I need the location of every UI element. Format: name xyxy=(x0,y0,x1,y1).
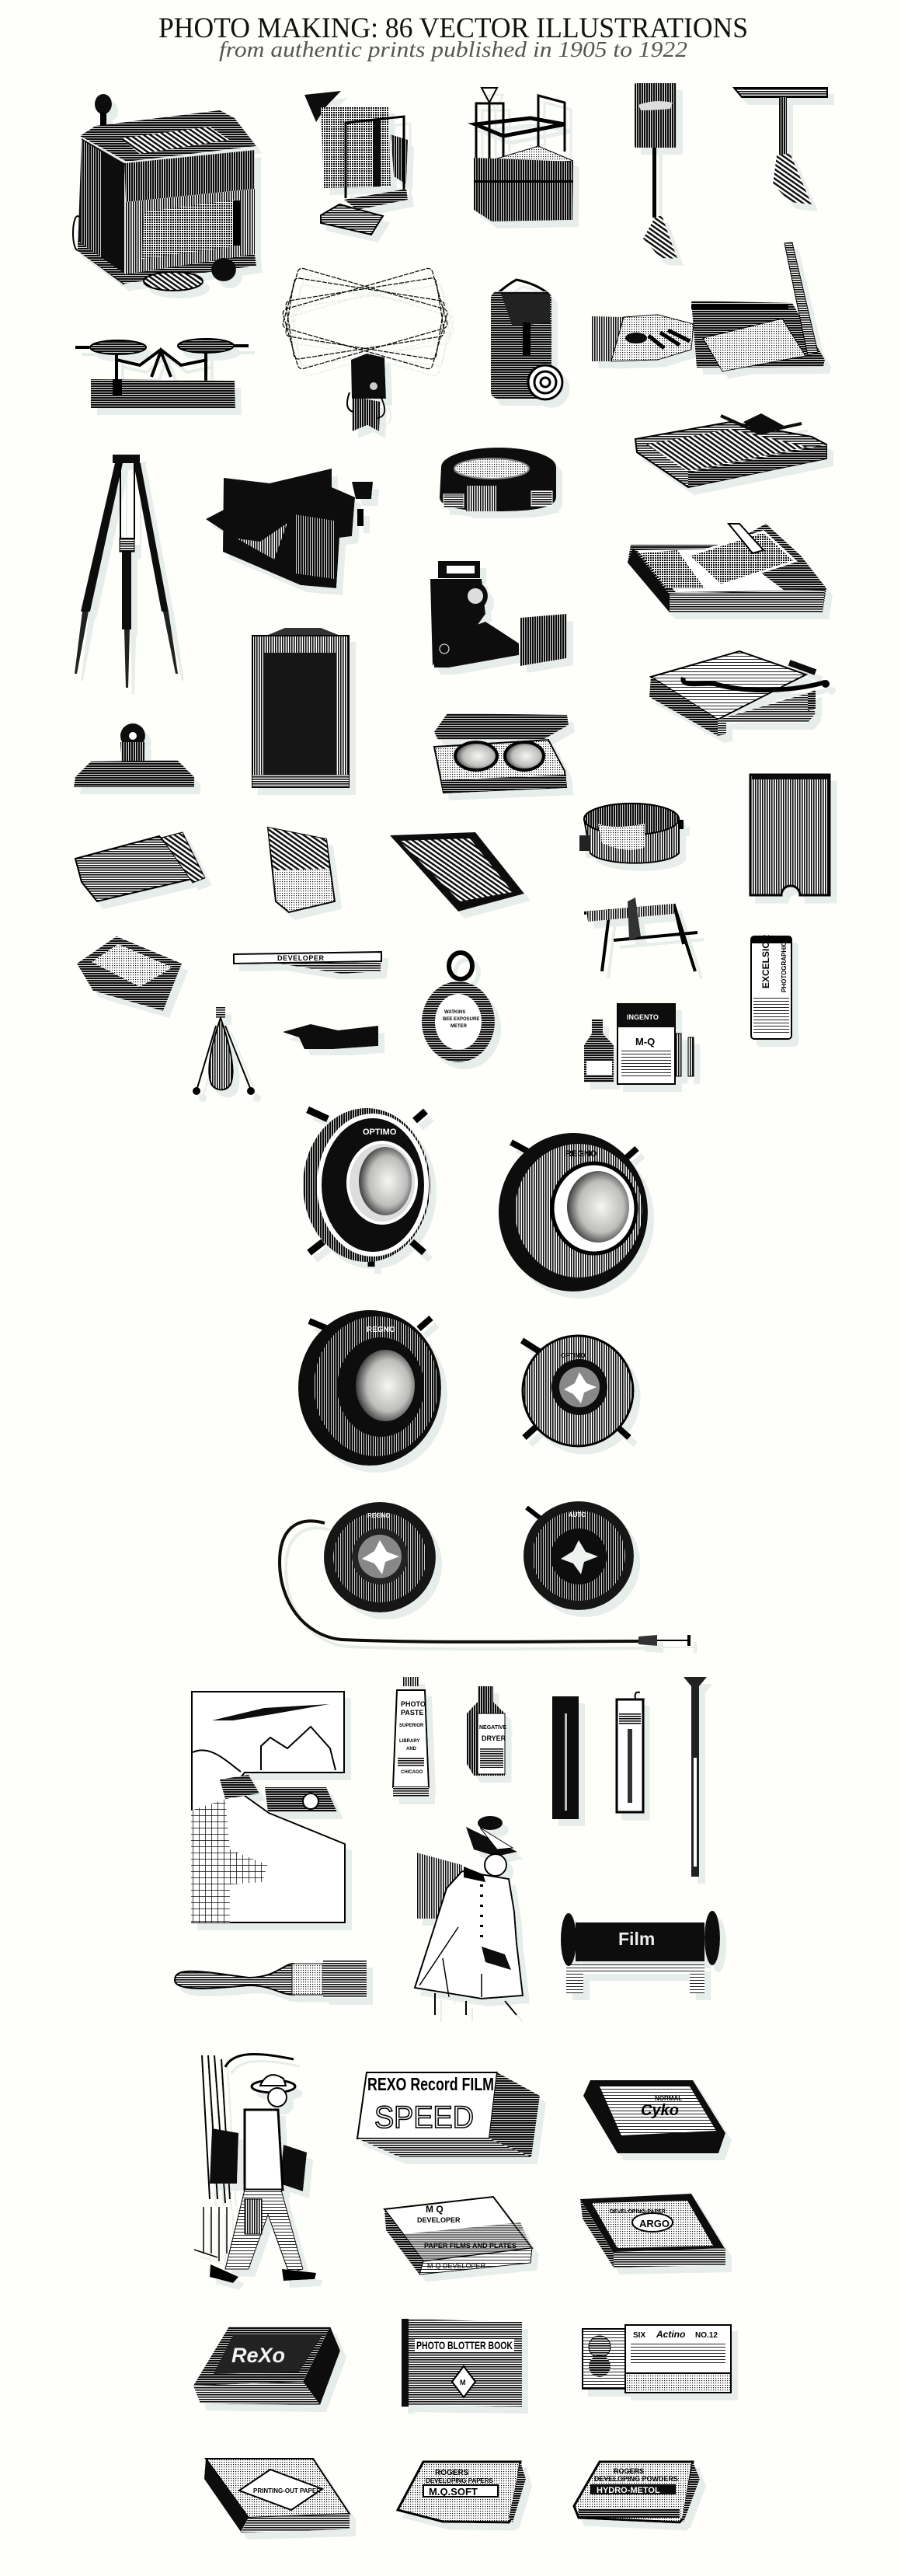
icon: photo paste tube: SUPERIOR xyxy=(399,1724,424,1728)
icon: negative dryer bottle: DRYER xyxy=(482,1734,506,1742)
icon: glass tray xyxy=(77,936,182,1011)
icon: blue print paper tube: EXCELSIOR xyxy=(760,934,771,988)
icon: fanned dry plates and holder xyxy=(282,267,448,431)
icon: rubber glove xyxy=(283,1024,378,1049)
icon: folding camera xyxy=(430,561,567,668)
icon: bulb and clips xyxy=(193,1007,255,1095)
icon: squeegee with hand xyxy=(734,88,827,204)
icon: Cyko normal paper box xyxy=(583,2080,725,2153)
icon: Ingento chemicals: INGENTO xyxy=(627,1013,659,1021)
icon: Argo developing paper box xyxy=(580,2194,725,2268)
icon: Actino No. 12 box: Actino xyxy=(656,2329,685,2340)
icon: dark thermometer xyxy=(552,1696,579,1819)
icon: negative dryer bottle xyxy=(467,1686,507,1776)
icon: photo paste tube xyxy=(393,1677,429,1797)
icon: blue print paper tube xyxy=(751,934,791,1039)
icon: film bag and roll xyxy=(491,280,562,399)
icon: Hydro-Metol developing powders box xyxy=(574,2462,700,2522)
icon: small Optimo shutter xyxy=(522,1336,633,1446)
icon: plate holder xyxy=(252,628,349,787)
icon: MQ developer tubes box: M Q xyxy=(426,2204,444,2215)
icon: negative dryer bottle: NEGATIVE xyxy=(479,1725,507,1731)
illustration: photographer in checked jacket xyxy=(191,1692,345,1922)
icon: print washing cabinet xyxy=(73,94,256,291)
icon: balance scale xyxy=(75,339,249,408)
icon: exposure meter xyxy=(422,953,495,1062)
icon: Rexo paper box: ReXo xyxy=(231,2344,285,2367)
icon: exposure meter: BEE EXPOSURE xyxy=(443,1017,479,1022)
icon: Actino No. 12 box xyxy=(583,2325,731,2393)
illustration: boy scout with camera xyxy=(194,2054,316,2283)
icon: flat plate holder xyxy=(75,832,205,901)
icon: paint brush xyxy=(175,1961,367,1998)
icon: photo paste tube: AND xyxy=(406,1747,417,1752)
icon: exposure meter: METER xyxy=(450,1024,468,1029)
icon: photo paste tube: PHOTO xyxy=(401,1700,426,1708)
icon: exposure meter: WATKINS xyxy=(444,1010,465,1015)
icon: box camera xyxy=(206,469,373,588)
icon: MQ developer tubes box: DEVELOPER xyxy=(417,2216,461,2224)
icon: MQ Soft developing papers box: M.Q.SOFT xyxy=(429,2486,478,2498)
icon: Rexo Record Film box: SPEED xyxy=(374,2100,474,2135)
icon: Ingento chemicals xyxy=(584,1004,694,1084)
icon: wooden printing tray xyxy=(635,413,826,487)
icon: drying rack xyxy=(584,898,697,971)
icon: Auto shutter xyxy=(524,1501,634,1610)
icon: Photo Blotter Book: M xyxy=(460,2379,466,2386)
subtitle: from authentic prints published in 1905 to 1922 xyxy=(219,38,687,62)
icon: tall plate sheath xyxy=(750,775,830,895)
icon: Hydro-Metol developing powders box: ROGERS xyxy=(614,2467,644,2475)
icon: Photo Blotter Book xyxy=(402,2319,522,2407)
icon: lens ring xyxy=(440,448,556,511)
icon: Argo developing paper box: DEVELOPING-PAPER xyxy=(610,2209,666,2215)
icon: film spool: Film xyxy=(618,1929,655,1949)
icon: Cyko normal paper box: NORMAL xyxy=(655,2095,682,2102)
icon: metal pot xyxy=(579,803,684,863)
icon: long chemical thermometer xyxy=(684,1677,707,1877)
icon: Argo developing paper box: ARGO xyxy=(639,2218,670,2229)
icon: small Optimo shutter: OPTIMO xyxy=(561,1352,586,1359)
icon: Cyko normal paper box: Cyko xyxy=(641,2102,679,2119)
icon: photo paste tube: LIBRARY xyxy=(399,1739,419,1744)
icon: photo paste tube: PASTE xyxy=(401,1709,423,1717)
icon: Rexo Record Film box xyxy=(357,2072,540,2157)
icon: Regno shutter lens: REGNO xyxy=(565,1149,597,1159)
icon: Photo Blotter Book: PHOTO BLOTTER BOOK xyxy=(416,2339,513,2351)
icon: MQ Soft developing papers box: ROGERS xyxy=(435,2469,469,2477)
icon: MQ Soft developing papers box: DEVELOPING PAPERS xyxy=(426,2477,494,2484)
icon: Hydro-Metol developing powders box: DEVELOPING POWDERS xyxy=(594,2475,678,2483)
icon: MQ developer tubes box: PAPER FILMS AND PLATES xyxy=(424,2242,517,2250)
icon: developing tray xyxy=(390,832,524,912)
icon: Regno shutter with cable release: REGNO xyxy=(367,1512,390,1519)
icon: MQ developer tubes box xyxy=(384,2197,532,2274)
icon: stereo lens case xyxy=(434,713,569,793)
icon: Optimo shutter lens: OPTIMO xyxy=(363,1128,397,1137)
icon: Regno shutter with cable release xyxy=(280,1502,691,1646)
icon: hand using trimmer xyxy=(592,242,825,371)
icon: Regno shutter lens xyxy=(499,1133,648,1291)
icon: printing frame xyxy=(628,524,826,612)
icon: paddle with hand xyxy=(635,83,677,259)
icon: Ingento chemicals: M-Q xyxy=(635,1036,655,1047)
icon: Auto shutter: AUTO xyxy=(569,1511,586,1518)
icon: Printing-Out Paper box: PRINTING-OUT PAPER xyxy=(253,2487,321,2494)
icon: developer tongs: DEVELOPER xyxy=(277,954,325,962)
icon: Regno lens with Rogers series xyxy=(298,1310,441,1466)
icon: Actino No. 12 box: SIX xyxy=(633,2331,645,2340)
icon: print clip xyxy=(74,723,194,787)
icon: tripod xyxy=(75,455,178,688)
icon: packaged film carton xyxy=(268,828,335,912)
icon: photo paste tube: CHICAGO xyxy=(401,1770,423,1775)
icon: Actino No. 12 box: NO.12 xyxy=(695,2331,718,2340)
icon: light thermometer xyxy=(617,1692,643,1812)
icon: MQ developer tubes box: M-Q DEVELOPER xyxy=(427,2262,486,2270)
icon: plate rack and tank xyxy=(474,88,573,221)
icon: MQ Soft developing papers box xyxy=(398,2462,526,2522)
icon: Rexo Record Film box: REXO Record FILM xyxy=(367,2074,494,2094)
icon: developing tank with rack xyxy=(304,91,408,235)
icon: Regno lens with Rogers series: REGNO xyxy=(367,1326,395,1334)
icon: developer tongs xyxy=(234,952,381,974)
icon: Hydro-Metol developing powders box: HYDRO-METOL xyxy=(597,2486,660,2495)
title: PHOTO MAKING: 86 VECTOR ILLUSTRATIONS xyxy=(158,12,748,44)
icon: blue print paper tube: PHOTOGRAPHIC xyxy=(781,942,788,992)
icon: film spool xyxy=(561,1911,720,1993)
icon: Rexo paper box xyxy=(193,2327,340,2405)
icon: Optimo shutter lens xyxy=(303,1108,430,1267)
icon: paper cutter xyxy=(649,651,830,736)
icon: Printing-Out Paper box xyxy=(204,2459,350,2532)
illustration: woman in coat and hat xyxy=(415,1816,523,2015)
